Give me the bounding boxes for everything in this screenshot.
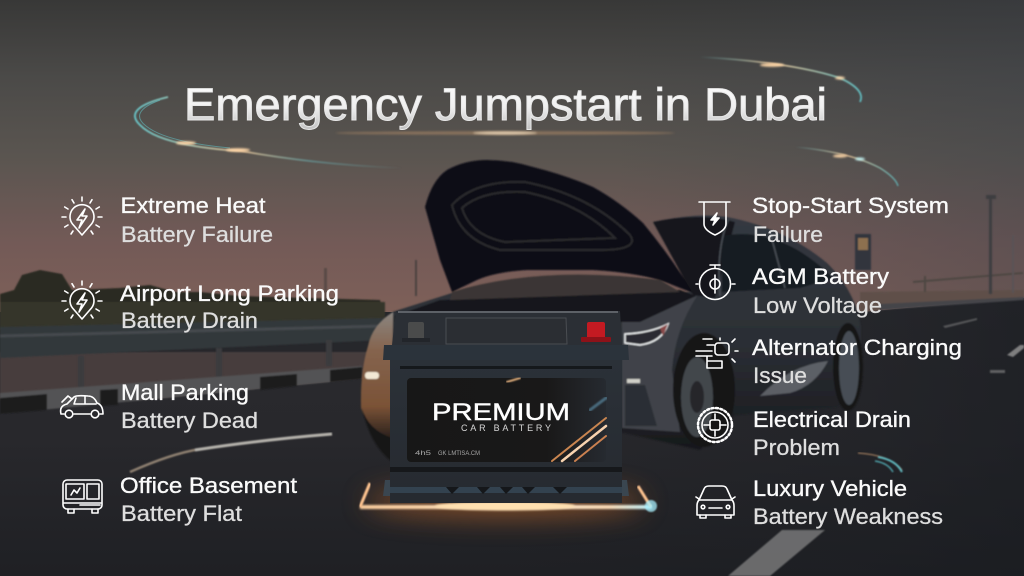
background: treeline and verge: [0, 268, 390, 400]
car body: [392, 215, 861, 450]
text: Office Basement Battery Flat: Office Basement: [120, 473, 297, 498]
background: highway pole and sign: [415, 195, 1014, 296]
item: Alternator Charging: [696, 335, 962, 388]
text: Mall Parking Battery Dead: Mall Parking: [121, 380, 249, 405]
item: Airport Long Parking: [62, 281, 339, 333]
front fender: [622, 296, 697, 432]
label light streaks: [507, 378, 606, 461]
battery flange: [383, 345, 629, 360]
text: Office Basement Battery Flat: Battery Flat: [121, 501, 242, 526]
label: PREMIUM: PREMIUM: [432, 399, 570, 426]
text: Luxury Vehicle Battery Weakness: [753, 476, 943, 529]
rear wheel: [833, 323, 863, 411]
background: road surface: [0, 298, 1024, 576]
glow: cyan spark: [645, 500, 657, 512]
icon: heat bolt pin: [62, 197, 102, 235]
background: sky right tone: [0, 0, 1024, 312]
glow: floor light line: [360, 505, 652, 509]
text: Stop-Start System Failure: [752, 193, 949, 247]
small arc near Electrical Drain: [858, 453, 902, 472]
car left fender: [361, 312, 393, 438]
icon: basement vehicle: [63, 480, 102, 513]
background: dusk sky: [0, 0, 1024, 312]
case lower band: [390, 467, 622, 472]
icon: shield bolt: [699, 202, 730, 235]
swoosh: left arc: [135, 97, 402, 168]
glow: right corner: [638, 486, 651, 507]
battery top edge highlight: [398, 311, 618, 313]
item: Luxury Vehicle: [696, 476, 943, 529]
text: Electrical Drain Problem: Problem: [753, 435, 840, 460]
swoosh: center glow under title: [335, 131, 675, 135]
terminal: positive: [581, 322, 611, 342]
item: Mall Parking: [61, 380, 258, 433]
icon: gauge: [696, 265, 735, 300]
left column list: [61, 193, 339, 526]
text: Stop-Start System Failure: Stop-Start System: [752, 193, 949, 218]
label: small print: GK LMTISA.CM: [438, 451, 480, 457]
text: Luxury Vehicle Battery Weakness: Battery Weakness: [753, 504, 943, 529]
battery top tray: [392, 311, 622, 345]
fog lamp: [627, 379, 640, 383]
text: Stop-Start System Failure: Failure: [753, 222, 823, 247]
title swooshes: [135, 57, 898, 186]
terminal: negative: [402, 322, 430, 342]
front wheel: [673, 333, 735, 447]
car left lamp: [365, 372, 379, 379]
text: Mall Parking Battery Dead: Battery Dead: [121, 408, 258, 433]
background: road right tone: [500, 298, 1024, 576]
background: guard rail and curb: [0, 318, 385, 414]
icon: car front: [696, 486, 735, 518]
open hood: [425, 160, 693, 293]
lower grille: [625, 385, 657, 426]
swoosh: right lower arc: [795, 147, 898, 186]
swoosh: right upper arc: [700, 57, 861, 102]
text: Extreme Heat Battery Failure: Extreme Heat: [120, 193, 266, 218]
battery ground glow: [360, 483, 657, 516]
text: Airport Long Parking Battery Drain: Battery Drain: [121, 308, 258, 333]
sill reflection: [760, 361, 828, 396]
battery base rib: [390, 487, 622, 493]
battery top center lid: [446, 318, 567, 344]
text: Alternator Charging Issue: Issue: [753, 363, 807, 388]
item: Stop-Start System: [699, 193, 949, 247]
label: CAR BATTERY: CAR BATTERY: [461, 423, 551, 433]
battery label panel: [407, 378, 606, 462]
text: AGM Battery Low Voltage: Low Voltage: [753, 293, 882, 318]
headlight: [625, 324, 668, 345]
icon: airport bolt pin: [62, 281, 102, 319]
text: Alternator Charging Issue: [752, 335, 962, 388]
icon: electrical gear: [698, 408, 732, 442]
item: AGM Battery: [696, 264, 889, 318]
text: Extreme Heat Battery Failure: [120, 193, 273, 247]
car: [361, 160, 863, 462]
side windows: [722, 234, 833, 292]
engine bay warm glow: [450, 275, 680, 300]
battery side feet: [383, 480, 629, 496]
label: small marks: 4h5: [415, 451, 432, 457]
text: Alternator Charging Issue: Alternator Charging: [752, 335, 962, 360]
text: Office Basement Battery Flat: [120, 473, 297, 526]
windshield: [653, 217, 735, 298]
engine bay: [395, 290, 696, 322]
background: distant rail and gantry right: [860, 273, 1024, 312]
title: Emergency Jumpstart in Dubai: [184, 79, 827, 130]
window pillar: [719, 220, 785, 296]
icon: alternator: [696, 338, 738, 368]
glow: left corner: [360, 483, 370, 507]
battery case: [390, 360, 622, 503]
text: Electrical Drain Problem: Electrical Drain: [753, 407, 911, 432]
text: Electrical Drain Problem: [753, 407, 911, 460]
item: Electrical Drain: [698, 407, 911, 460]
icon: car with open hood: [61, 396, 103, 418]
right column list: [696, 193, 962, 529]
car left lower shadow: [362, 408, 392, 462]
battery: [383, 311, 629, 503]
text: Airport Long Parking Battery Drain: [120, 281, 339, 333]
battery feet notches: [446, 487, 567, 494]
text: Mall Parking Battery Dead: [121, 380, 258, 433]
case groove: [400, 366, 612, 369]
item: Extreme Heat: [62, 193, 273, 247]
glow: center flare: [435, 502, 575, 510]
text: AGM Battery Low Voltage: AGM Battery: [752, 264, 889, 289]
hood inner ribs: [452, 182, 632, 250]
text: Airport Long Parking Battery Drain: Airport Long Parking: [120, 281, 339, 306]
text: Luxury Vehicle Battery Weakness: Luxury Vehicle: [753, 476, 907, 501]
text: Extreme Heat Battery Failure: Battery Failure: [121, 222, 273, 247]
text: AGM Battery Low Voltage: [752, 264, 889, 318]
item: Office Basement: [63, 473, 297, 526]
road lane markings right: [728, 318, 1024, 576]
road streak left: [130, 434, 332, 472]
